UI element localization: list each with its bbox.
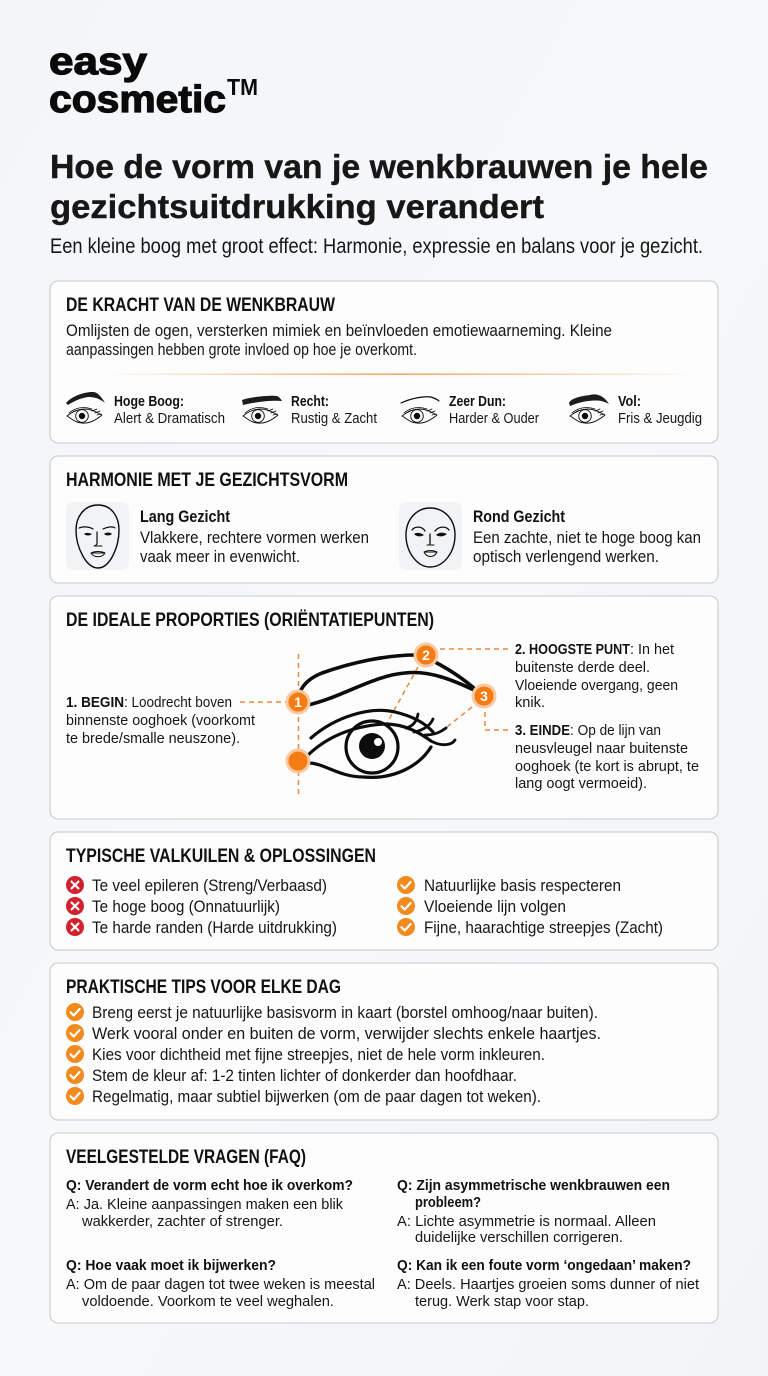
list: tips (66, 1003, 601, 1106)
text block: 3. einde: neusvleugel naar buitenste (515, 740, 688, 757)
panel: typische valkuilen en oplossingen (50, 832, 718, 950)
icon: hoge boog (66, 392, 105, 423)
list: tips: Kies voor dichtheid met fijne streepjes, niet de hele vorm inkleuren. (92, 1045, 545, 1064)
heading: harmonie: HARMONIE MET JE GEZICHTSVORM (66, 469, 348, 491)
title: gezichtsuitdrukking verandert (50, 188, 544, 225)
panel: harmonie met je gezichtsvorm (50, 456, 718, 583)
text block: 2. hoogste punt: knik. (515, 694, 545, 711)
label: vol: Fris & Jeugdig (618, 410, 702, 427)
marker: binnenste ooghoek (287, 750, 309, 772)
text block: 3. einde: lang oogt vermoeid). (515, 775, 647, 792)
marker 2 (415, 644, 437, 666)
faq: ongedaan maken: A: Deels. Haartjes groeien soms dunner of niet (397, 1276, 700, 1293)
faq: asymmetrie (397, 1177, 670, 1246)
text block: kracht intro: aanpassingen hebben grote invloed op hoe je overkomt. (66, 340, 417, 359)
marker 2: 2 (422, 647, 430, 663)
text block: 3. einde: ooghoek (te kort is abrupt, te (515, 758, 699, 775)
label: hoge boog: Hoge Boog: (114, 393, 184, 410)
label: recht: Rustig & Zacht (291, 410, 378, 427)
logo: TM (227, 74, 258, 100)
faq: hoe vaak (66, 1257, 375, 1310)
text block: 2. hoogste punt (515, 641, 678, 711)
faq: asymmetrie: Q: Zijn asymmetrische wenkbrauwen een (397, 1177, 670, 1194)
text block: 3. einde (515, 722, 699, 792)
text block: 1. begin: 1. BEGIN (66, 694, 124, 711)
icon: lang gezicht (66, 502, 129, 570)
list: oplossingen: Vloeiende lijn volgen (424, 897, 566, 916)
list: valkuilen: Te harde randen (Harde uitdrukking) (92, 918, 337, 937)
logo (49, 41, 258, 121)
text block: lang gezicht (140, 507, 369, 566)
title: Hoe de vorm van je wenkbrauwen je hele (50, 148, 708, 185)
list: valkuilen: Te hoge boog (Onnatuurlijk) (92, 897, 280, 916)
text block: kracht intro: Omlijsten de ogen, versterken mimiek en beïnvloeden emotiewaarneming. Kleine (66, 321, 612, 340)
list: oplossingen: Natuurlijke basis respecteren (424, 876, 621, 895)
text block: 1. begin: te brede/smalle neuszone). (66, 730, 240, 747)
text block: rond gezicht: Een zachte, niet te hoge boog kan (473, 528, 701, 547)
label: recht: Recht: (291, 393, 329, 410)
text block: rond gezicht: optisch verlengend werken. (473, 547, 659, 566)
label: vol (618, 393, 702, 427)
text block: rond gezicht: Rond Gezicht (473, 507, 565, 526)
list: tips: Werk vooral onder en buiten de vorm, verwijder slechts enkele haartjes. (92, 1024, 601, 1043)
text block: kracht intro (66, 321, 612, 359)
faq: hoe vaak: voldoende. Voorkom te veel weghalen. (82, 1293, 334, 1310)
list: tips: Breng eerst je natuurlijke basisvorm in kaart (borstel omhoog/naar buiten). (92, 1003, 598, 1022)
heading: faq: VEELGESTELDE VRAGEN (FAQ) (66, 1146, 306, 1168)
panel: praktische tips (50, 963, 718, 1120)
faq: hoe vaak: A: Om de paar dagen tot twee weken is meestal (66, 1276, 375, 1293)
icon: recht (242, 396, 282, 423)
faq: hoe vaak: Q: Hoe vaak moet ik bijwerken? (66, 1257, 276, 1274)
text block: rond gezicht (473, 507, 701, 566)
marker 1: 1 (294, 694, 302, 710)
label: zeer dun: Harder & Ouder (449, 410, 539, 427)
faq: asymmetrie: A: Lichte asymmetrie is normaal. Alleen (397, 1213, 656, 1230)
text block: 1. begin: : Loodrecht boven (124, 694, 232, 711)
text block: 1. begin (66, 694, 256, 747)
marker 3: 3 (480, 688, 488, 704)
panel: de kracht van de wenkbrauw (50, 281, 718, 443)
text block: 2. hoogste punt: 2. HOOGSTE PUNT (515, 641, 630, 658)
diagram: oog en wenkbrauw (240, 644, 511, 796)
icon: vol (569, 394, 609, 423)
title (50, 148, 708, 225)
text block: 3. einde: 3. EINDE (515, 722, 570, 739)
list: tips: Regelmatig, maar subtiel bijwerken (om de paar dagen tot weken). (92, 1087, 541, 1106)
label: recht (291, 393, 378, 427)
logo: cosmetic (49, 79, 226, 121)
label: zeer dun: Zeer Dun: (449, 393, 506, 410)
marker 3 (473, 685, 495, 707)
faq: verandert de vorm: Q: Verandert de vorm echt hoe ik overkom? (66, 1177, 353, 1194)
list: oplossingen: Fijne, haarachtige streepjes (Zacht) (424, 918, 663, 937)
label: vol: Vol: (618, 393, 641, 410)
faq: verandert de vorm: A: Ja. Kleine aanpassingen maken een blik (66, 1196, 343, 1213)
faq: verandert de vorm (66, 1177, 353, 1230)
faq: ongedaan maken: terug. Werk stap voor stap. (415, 1293, 589, 1310)
text block: lang gezicht: Lang Gezicht (140, 507, 230, 526)
faq: ongedaan maken (397, 1257, 700, 1310)
faq: ongedaan maken: Q: Kan ik een foute vorm ‘ongedaan’ maken? (397, 1257, 691, 1274)
icon: rond gezicht (399, 502, 462, 570)
text block: 2. hoogste punt: Vloeiende overgang, geen (515, 677, 678, 694)
heading: valkuilen: TYPISCHE VALKUILEN & OPLOSSINGEN (66, 845, 376, 867)
faq: asymmetrie: duidelijke verschillen corrigeren. (415, 1229, 623, 1246)
list: tips: Stem de kleur af: 1-2 tinten lichter of donkerder dan hoofdhaar. (92, 1066, 517, 1085)
logo: easy (49, 41, 147, 83)
heading: tips: PRAKTISCHE TIPS VOOR ELKE DAG (66, 976, 341, 998)
text block: 2. hoogste punt: : In het (630, 641, 675, 658)
text block: 2. hoogste punt: buitenste derde deel. (515, 659, 650, 676)
list: oplossingen (397, 876, 663, 937)
text block: 3. einde: : Op de lijn van (570, 722, 661, 739)
icon: zeer dun (401, 397, 439, 423)
label: hoge boog: Alert & Dramatisch (114, 410, 225, 427)
faq: verandert de vorm: wakkerder, zachter of strenger. (81, 1213, 283, 1230)
label: hoge boog (114, 393, 225, 427)
heading: proporties: DE IDEALE PROPORTIES (ORIËNTATIEPUNTEN) (66, 608, 434, 631)
marker 1 (287, 691, 309, 713)
faq: asymmetrie: probleem? (415, 1194, 481, 1211)
panel: de ideale proporties (50, 596, 718, 819)
heading: kracht: DE KRACHT VAN DE WENKBRAUW (66, 294, 335, 316)
text block: lang gezicht: vaak meer in evenwicht. (140, 547, 300, 566)
text block: 1. begin: binnenste ooghoek (voorkomt (66, 712, 256, 729)
list: valkuilen (66, 876, 337, 937)
text block: lang gezicht: Vlakkere, rechtere vormen werken (140, 528, 369, 547)
panel: veelgestelde vragen (50, 1133, 718, 1323)
list: valkuilen: Te veel epileren (Streng/Verbaasd) (92, 876, 327, 895)
label: zeer dun (449, 393, 539, 427)
